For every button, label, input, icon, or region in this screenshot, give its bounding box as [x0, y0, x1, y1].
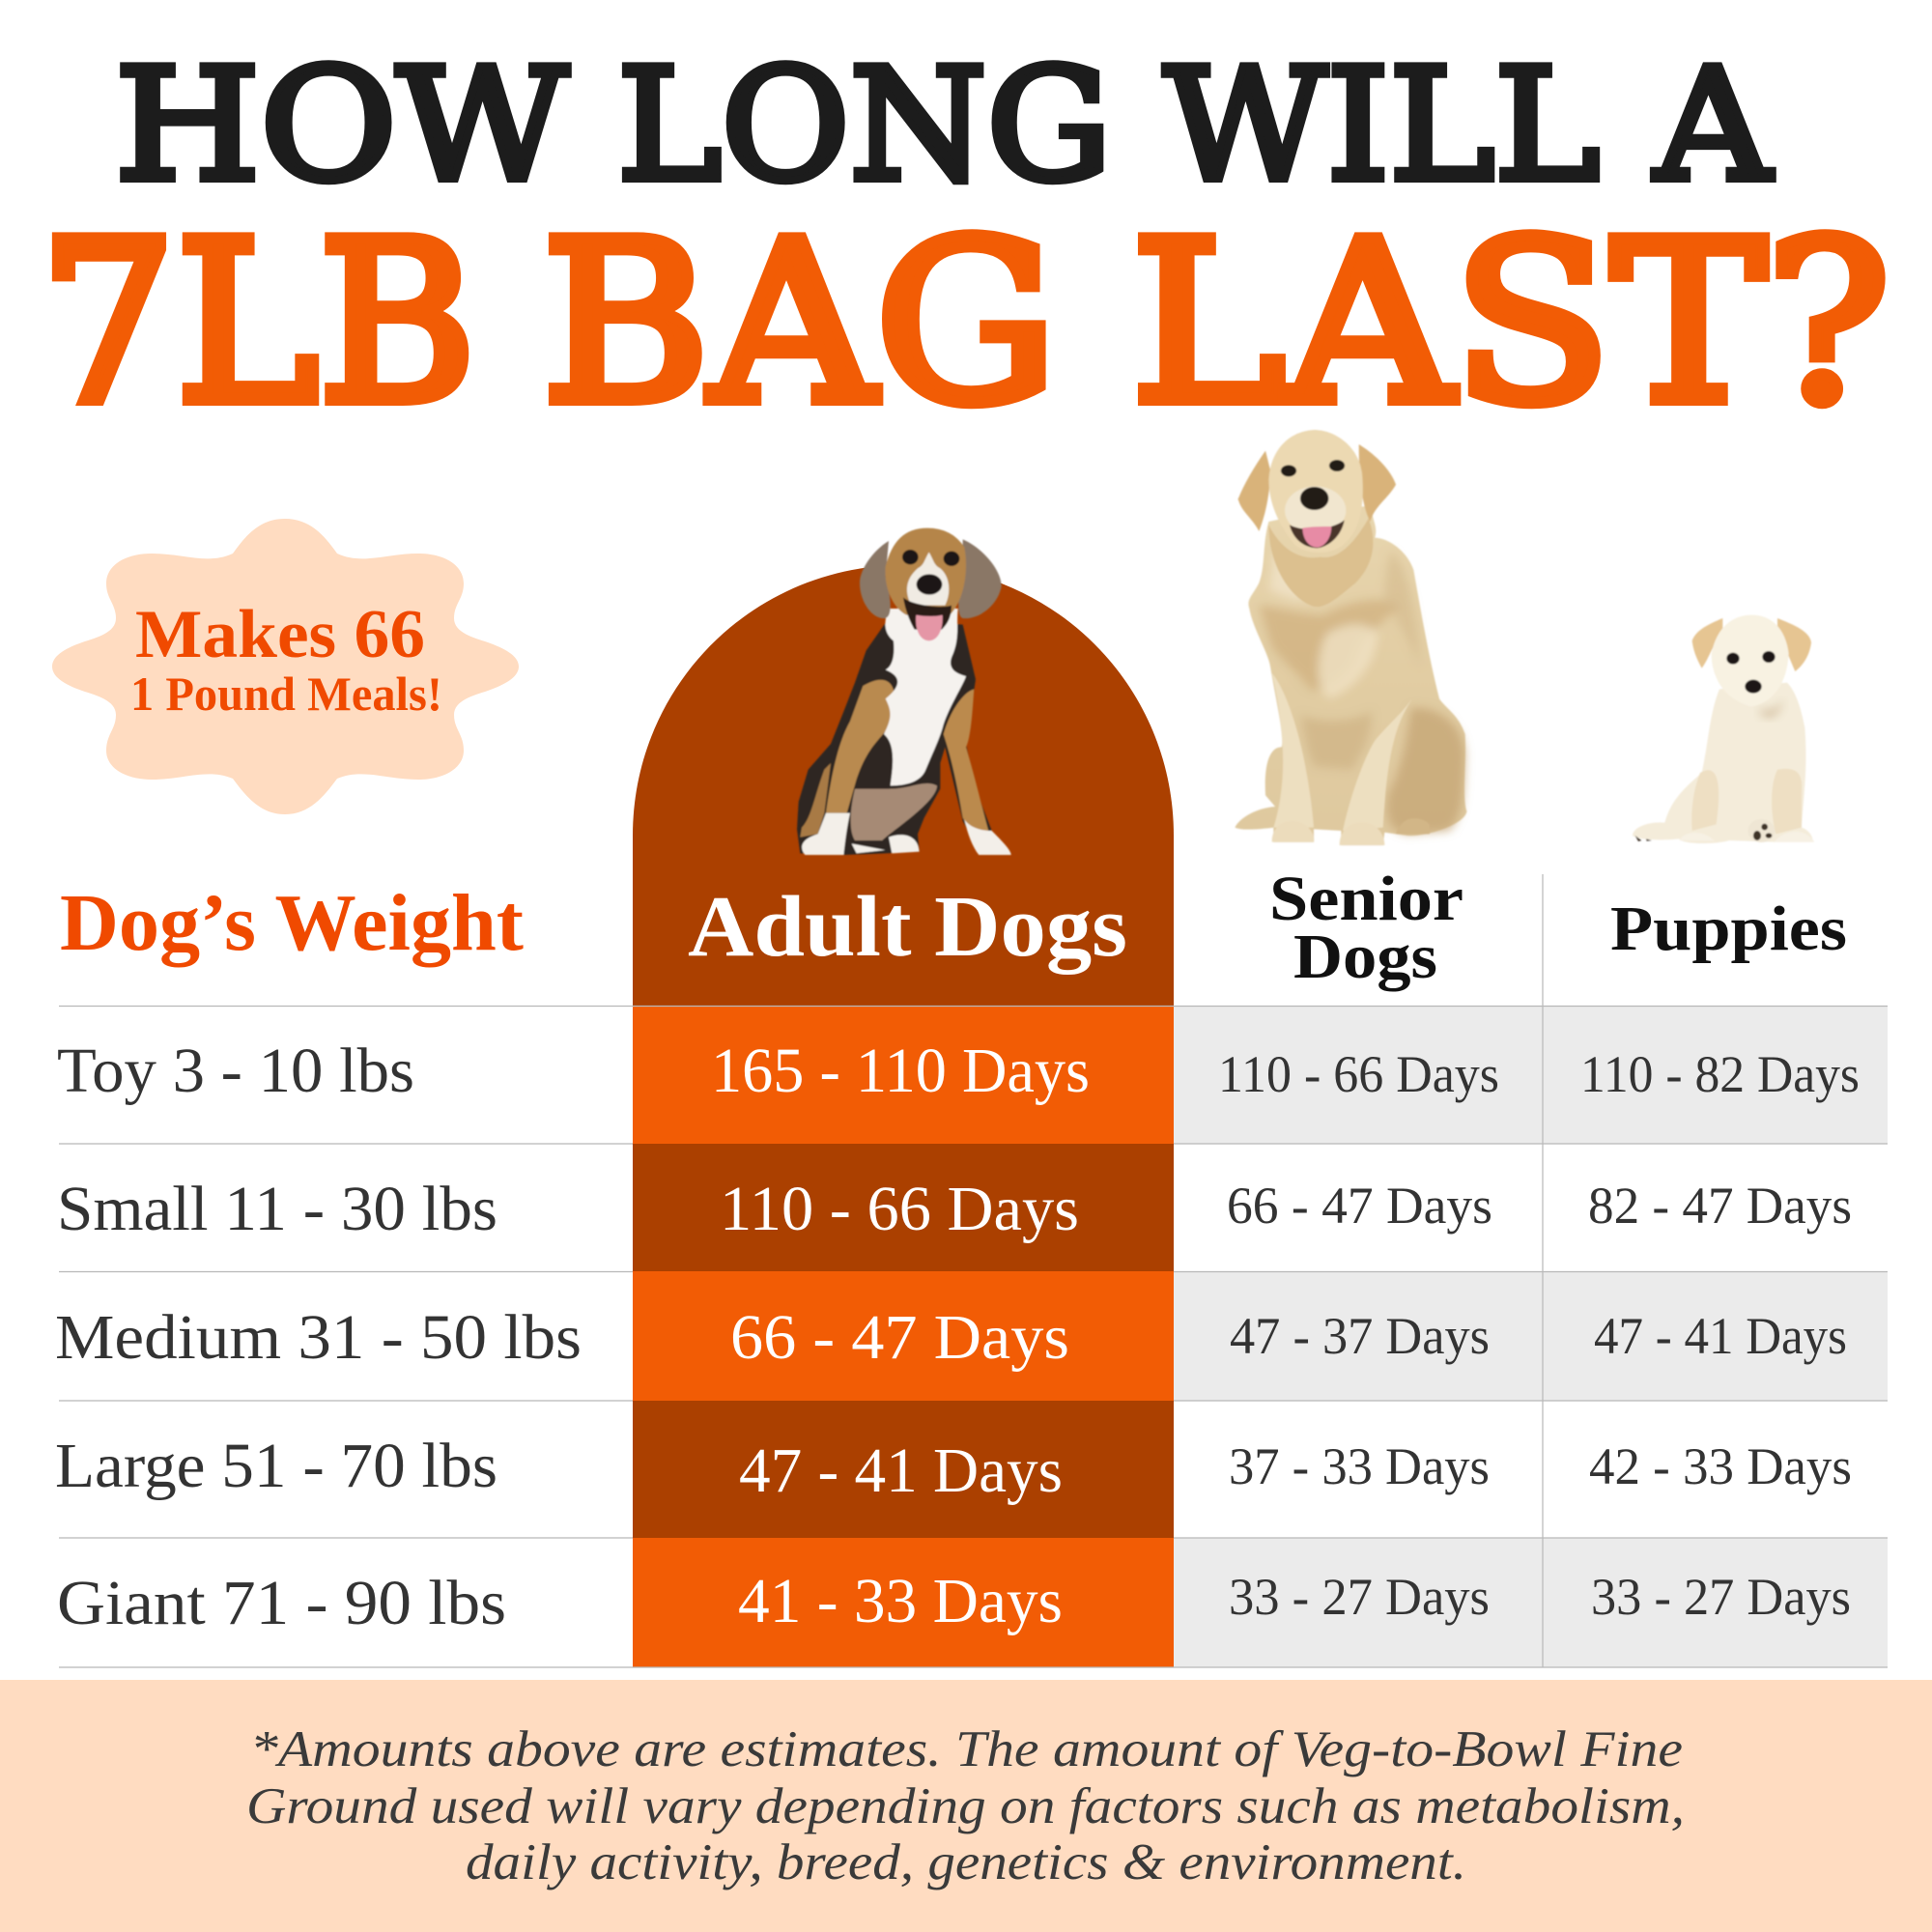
title: how long will a: WILL: [1164, 35, 1600, 215]
icon: beagle adult dog: [797, 528, 1011, 855]
puppy paws: [1679, 832, 1814, 842]
footnote text: [246, 1721, 1685, 1890]
beagle head: [885, 528, 966, 615]
weight column labels: Large 51 - 70 lbs: [55, 1431, 497, 1501]
title: 7lb bag last?: [40, 195, 1890, 453]
golden mouth: [1290, 520, 1345, 548]
beagle left foreleg: [826, 680, 895, 813]
column heading: dog's weight: Dog’s Weight: [60, 878, 524, 968]
senior dogs values: 33 - 27 Days: [1229, 1568, 1490, 1626]
footnote text: *Amounts above are estimates. The amount of Veg-to-Bowl Fine: [250, 1721, 1683, 1777]
title: how long will a: HOW: [115, 35, 568, 215]
adult dogs values: [711, 1036, 1090, 1636]
puppies values: 47 - 41 Days: [1594, 1307, 1847, 1365]
column heading: adult dogs: Adult Dogs: [688, 879, 1127, 975]
puppies values: 33 - 27 Days: [1591, 1568, 1851, 1626]
beagle dark silhouette: [797, 618, 1011, 855]
golden back paw: [1396, 818, 1430, 834]
puppy ears: [1692, 618, 1811, 671]
beagle belly: [851, 783, 937, 840]
puppies values: 82 - 47 Days: [1588, 1177, 1852, 1235]
puppy raised paw pads: [1635, 819, 1775, 842]
golden eyes and nose: [1281, 460, 1345, 510]
adult dogs values: 66 - 47 Days: [730, 1302, 1069, 1373]
golden head: [1268, 430, 1363, 553]
puppies values: 110 - 82 Days: [1580, 1045, 1860, 1103]
icon: golden retriever senior dog: [1235, 430, 1466, 845]
weight column labels: Small 11 - 30 lbs: [57, 1174, 497, 1244]
golden tongue: [1302, 526, 1331, 548]
senior dogs values: [1218, 1045, 1499, 1626]
weight column labels: Medium 31 - 50 lbs: [55, 1302, 582, 1373]
puppies values: [1580, 1045, 1860, 1626]
title: 7lb bag last?: 7LB: [40, 195, 476, 453]
golden fur shading: [1259, 551, 1465, 834]
beagle mouth: [903, 597, 952, 630]
beagle eyes and nose: [902, 550, 959, 595]
adult dogs values: 47 - 41 Days: [739, 1435, 1063, 1506]
footnote text: Ground used will vary depending on factors such as metabolism,: [246, 1778, 1685, 1834]
puppy eyes and nose: [1726, 651, 1776, 694]
title: how long will a: A: [1654, 35, 1774, 215]
weight column labels: Toy 3 - 10 lbs: [57, 1036, 414, 1106]
title: 7lb bag last?: LAST?: [1131, 195, 1890, 453]
senior dogs values: 37 - 33 Days: [1229, 1437, 1490, 1495]
puppy leg shading: [1691, 769, 1802, 834]
adult dogs values: 41 - 33 Days: [738, 1566, 1063, 1636]
golden ears: [1238, 444, 1396, 531]
beagle white paws: [802, 813, 1011, 855]
beagle right foreleg: [944, 689, 988, 831]
title: 7lb bag last?: BAG: [542, 195, 1058, 453]
puppies values: 42 - 33 Days: [1589, 1437, 1852, 1495]
badge: makes 66 1 pound meals: [52, 519, 519, 814]
golden neck ruff: [1268, 519, 1373, 607]
adult dogs values: 165 - 110 Days: [711, 1036, 1090, 1106]
weight column labels: [55, 1036, 582, 1638]
icon: cream puppy: [1633, 615, 1814, 843]
senior dogs values: 110 - 66 Days: [1218, 1045, 1499, 1103]
golden left foreleg: [1272, 673, 1314, 828]
beagle blaze: [907, 553, 949, 606]
beagle ears: [860, 539, 1002, 618]
column heading: puppies: Puppies: [1610, 894, 1847, 964]
title: how long will a: LONG: [617, 35, 1112, 215]
column heading: senior dogs: Dogs: [1293, 922, 1437, 992]
panel: adult dogs arch: [633, 565, 1174, 1006]
badge: makes 66 1 pound meals: 1 Pound Meals!: [130, 667, 442, 721]
footer panel: [0, 1680, 1932, 1932]
puppy neck shading: [1758, 698, 1784, 719]
title: how long will a: [115, 35, 1774, 215]
beagle tongue: [916, 615, 943, 640]
adult dogs values: 110 - 66 Days: [720, 1174, 1079, 1244]
puppy head: [1712, 615, 1789, 707]
golden paws: [1272, 821, 1384, 845]
senior dogs values: 47 - 37 Days: [1230, 1307, 1490, 1365]
golden right foreleg: [1343, 698, 1412, 831]
weight column labels: Giant 71 - 90 lbs: [57, 1568, 506, 1638]
beagle hind leg: [800, 763, 831, 838]
puppy body: [1633, 683, 1813, 843]
column heading: senior dogs: Senior: [1269, 864, 1463, 934]
badge: makes 66 1 pound meals: Makes 66: [135, 597, 425, 672]
senior dogs values: 66 - 47 Days: [1227, 1177, 1492, 1235]
footnote text: daily activity, breed, genetics & environment.: [466, 1834, 1466, 1890]
beagle white chest: [884, 609, 966, 785]
golden muzzle: [1285, 486, 1346, 534]
golden body: [1235, 505, 1466, 845]
table rows background: [59, 874, 1888, 1667]
column heading: senior dogs: [1269, 864, 1463, 992]
